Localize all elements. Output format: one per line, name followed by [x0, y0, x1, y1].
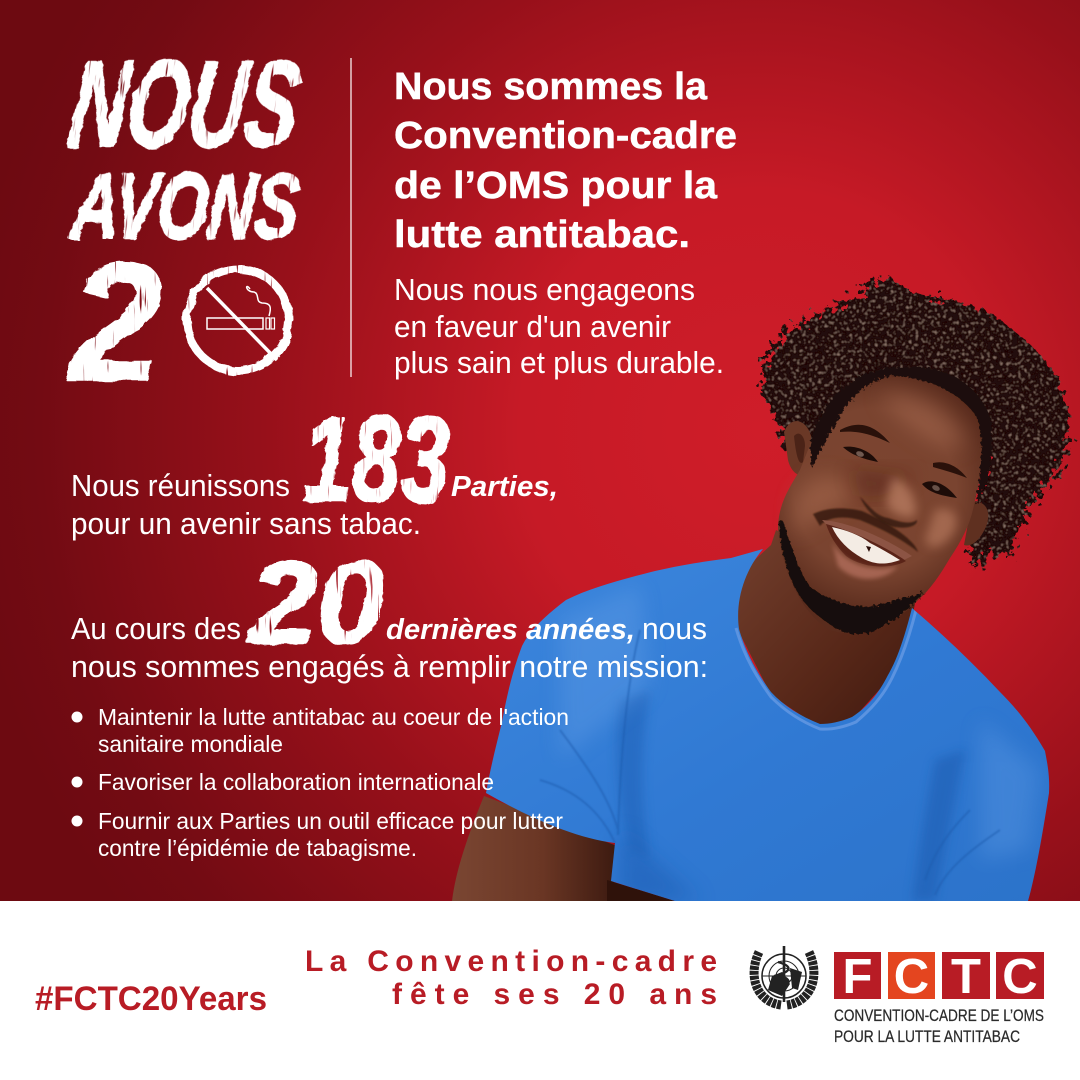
neck — [733, 530, 916, 728]
letter tile F — [834, 950, 881, 1004]
lower lip — [832, 542, 898, 579]
upper lip — [822, 520, 912, 562]
teeth — [832, 527, 900, 564]
ear right — [964, 502, 988, 546]
bullet 3 — [72, 808, 563, 861]
bullet 3: contre l’épidémie de tabagisme. — [98, 835, 417, 861]
shirt collar trim — [736, 610, 916, 729]
cheek highlight right — [925, 509, 957, 547]
forearm shadow — [607, 880, 675, 901]
brush word: AVONS: AVONS — [67, 155, 303, 258]
subtitle text block — [394, 272, 724, 380]
mouth — [826, 524, 906, 567]
anniversary tagline — [305, 945, 717, 1011]
brow right — [933, 462, 967, 478]
anniversary tagline: La Convention-cadre — [305, 945, 717, 978]
logo wordmark — [834, 1006, 1044, 1046]
title: Nous sommes la Convention-cadre: Nous sommes la — [394, 66, 708, 108]
brush numeral: 20: 20 — [248, 537, 384, 669]
subtitle text block: en faveur d'un avenir — [394, 309, 671, 344]
statement: 183 Parties: pour un avenir sans tabac. — [71, 506, 421, 541]
t-shirt — [486, 549, 1049, 901]
hair fringe over forehead — [810, 367, 992, 506]
logo: FCTC — [834, 950, 1044, 1046]
statement: 183 Parties — [71, 391, 558, 541]
arm — [452, 796, 617, 901]
face — [778, 371, 988, 634]
statement: 20 dernières années: nous sommes engagés à remplir notre mission: — [71, 649, 708, 684]
eye left — [843, 447, 878, 462]
cheek highlight left — [795, 476, 855, 535]
mustache — [813, 508, 918, 552]
bullet 2: Favoriser la collaboration internationale — [98, 769, 494, 795]
letter tile C: C — [894, 950, 929, 1004]
title: Nous sommes la Convention-cadre: de l’OMS pour la — [394, 165, 718, 207]
bullet 1: Maintenir la lutte antitabac au coeur de l'action — [98, 704, 569, 730]
hashtag: #FCTC20Years — [35, 980, 267, 1018]
eye right — [922, 481, 957, 498]
brush numeral: 183: 183 — [303, 391, 449, 527]
brow left — [840, 425, 890, 443]
subtitle text block: plus sain et plus durable. — [394, 345, 724, 380]
statement: 183 Parties: Nous réunissons — [71, 468, 290, 503]
forehead highlight — [880, 394, 965, 447]
logo wordmark: POUR LA LUTTE ANTITABAC — [834, 1027, 1020, 1046]
nose — [886, 478, 915, 517]
letter tile T: T — [951, 950, 981, 1004]
cheek shadow under eyes — [852, 468, 899, 498]
letter tile T — [942, 950, 990, 1004]
photo: smiling man in a blue t-shirt — [452, 278, 1069, 901]
statement: 20 dernières années: dernières années, — [386, 614, 635, 646]
face shape — [778, 374, 983, 610]
bullet 3: Fournir aux Parties un outil efficace pour lutter — [98, 808, 563, 834]
bullet 1 — [72, 704, 569, 757]
title: Nous sommes la Convention-cadre: Convention-cadre — [394, 115, 737, 157]
bullet 1: sanitaire mondiale — [98, 731, 283, 757]
divider line — [350, 58, 352, 377]
subtitle text block: Nous nous engageons — [394, 272, 695, 307]
footer band — [0, 901, 1080, 1080]
letter tile C: C — [1002, 950, 1038, 1004]
title: Nous sommes la Convention-cadre — [394, 66, 737, 256]
icon: WHO emblem — [754, 946, 814, 1005]
hair — [761, 278, 1069, 568]
letter tile F: F — [843, 950, 872, 1004]
bullet list: mission — [72, 704, 569, 861]
statement: 183 Parties: Parties, — [451, 471, 558, 503]
beard — [779, 520, 925, 634]
shirt shading — [616, 694, 648, 852]
statement: 20 dernières années: Au cours des — [71, 611, 241, 646]
anniversary tagline: fête ses 20 ans — [392, 978, 717, 1011]
title: Nous sommes la Convention-cadre: lutte antitabac. — [394, 214, 690, 256]
ear left — [784, 421, 811, 475]
brush word: NOUS: NOUS — [63, 35, 308, 172]
heading: NOUS AVONS 20 brush lettering — [63, 35, 308, 416]
statement: 20 dernières années — [71, 537, 708, 684]
icon: no smoking sign as the zero — [187, 269, 289, 371]
statement: 20 dernières années: nous — [642, 611, 707, 646]
brush numeral: 2: 2 — [67, 228, 162, 416]
